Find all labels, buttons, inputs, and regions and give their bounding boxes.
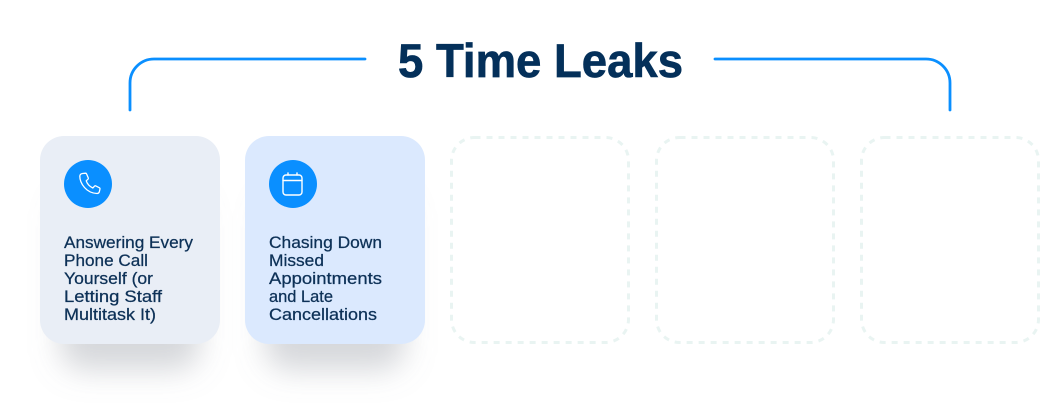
text: card 2 label: and Late [269,288,333,306]
text: card 2 label: Cancellations [269,306,377,324]
panel: card 1 phone calls [40,136,220,370]
panel: empty placeholder 5 [862,138,1038,342]
text: card 1 label: Yourself (or [64,270,154,288]
text: card 1 label: Letting Staff [64,288,162,306]
text: card 1 label: Phone Call [64,252,148,270]
text: card 2 label: Appointments [269,270,382,288]
panel: card 2 missed appointments [245,136,425,370]
text: card 1 label [64,234,194,324]
text: card 1 label: Answering Every [64,234,194,252]
left bracket arrow line [130,59,365,110]
panel: empty placeholder 4 [656,138,834,342]
icon: phone [64,160,112,208]
title: 5 Time Leaks [398,34,683,87]
text: card 2 label: Missed [269,252,324,270]
text: card 2 label: Chasing Down [269,234,382,252]
icon: calendar [269,160,317,208]
text: card 1 label: Multitask It) [64,306,156,324]
right bracket arrow line [715,59,950,110]
panel: empty placeholder 3 [452,138,628,342]
text: card 2 label [269,234,382,324]
